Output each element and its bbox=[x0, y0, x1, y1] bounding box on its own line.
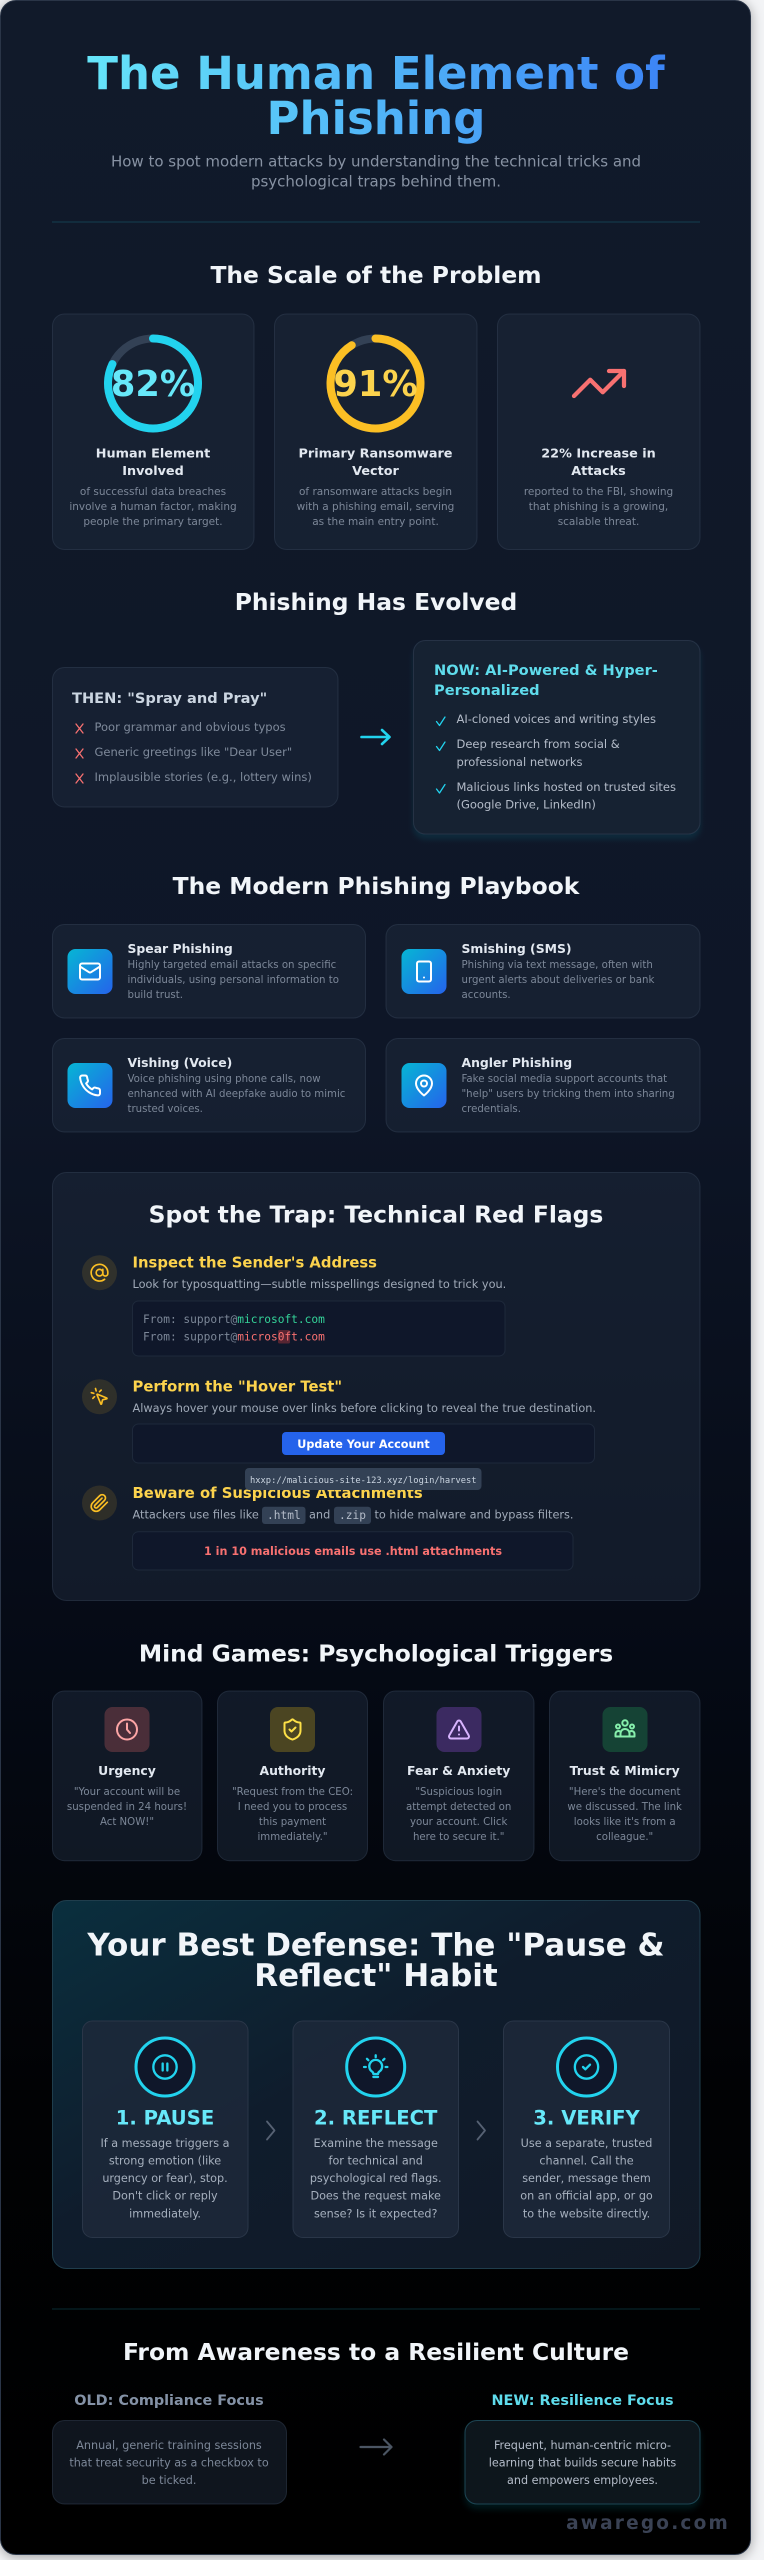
card text bbox=[128, 941, 339, 1001]
icon: mouse pointer click bbox=[82, 1379, 117, 1414]
step text: If a message triggers a bbox=[100, 2137, 230, 2150]
title bbox=[87, 47, 665, 145]
step text: to the website directly. bbox=[523, 2207, 650, 2220]
heading: spot the trap: Spot the Trap: Technical Red Flags bbox=[149, 1200, 603, 1228]
card text: Phishing via text message, often with bbox=[462, 960, 653, 971]
list item: malicious links bbox=[436, 780, 676, 812]
stat description bbox=[524, 486, 673, 528]
card text bbox=[128, 1055, 345, 1115]
stat description: with a phishing email, serving bbox=[297, 501, 454, 513]
stat description: people the primary target. bbox=[83, 516, 223, 528]
trigger quote: "Request from the CEO: bbox=[232, 1787, 353, 1798]
trigger quote: suspended in 24 hours! bbox=[67, 1802, 187, 1813]
step text: Don't click or reply bbox=[112, 2190, 218, 2203]
arrow: reflect to verify bbox=[478, 2122, 485, 2140]
stat label: 22% Increase in bbox=[541, 446, 656, 462]
panel: stat 82% bbox=[52, 314, 254, 550]
icon: clock bbox=[104, 1707, 150, 1752]
flag heading: Beware of Suspicious Attachments bbox=[132, 1485, 423, 1502]
stat description: involve a human factor, making bbox=[69, 501, 237, 513]
heading: playbook: The Modern Phishing Playbook bbox=[173, 872, 580, 900]
list item: malicious links: Malicious links hosted on trusted sites bbox=[456, 780, 676, 794]
trigger title: Trust & Mimicry bbox=[570, 1763, 680, 1778]
card text bbox=[462, 941, 654, 1001]
step title: 1. PAUSE bbox=[116, 2106, 214, 2129]
panel: authority bbox=[218, 1691, 368, 1861]
step text: Does the request make bbox=[310, 2190, 441, 2203]
step title: 2. REFLECT bbox=[314, 2106, 438, 2129]
icon: mail bbox=[68, 949, 112, 994]
title: Phishing bbox=[267, 92, 485, 145]
flag heading: Perform the "Hover Test" bbox=[132, 1379, 342, 1396]
step: pause bbox=[82, 2021, 248, 2238]
stat description: scalable threat. bbox=[558, 516, 639, 528]
trigger quote: we discussed. The link bbox=[567, 1802, 682, 1813]
heading: phishing has evolved: Phishing Has Evolved bbox=[235, 588, 517, 616]
step text: on an official app, or go bbox=[520, 2190, 653, 2203]
title: The Human Element of bbox=[87, 47, 665, 100]
icon: check circle bbox=[558, 2038, 616, 2096]
icon: phone bbox=[68, 1063, 112, 1108]
subtitle bbox=[111, 152, 641, 190]
donut chart: 82%: 82% bbox=[111, 364, 195, 405]
stat label: Vector bbox=[352, 464, 400, 479]
step text: strong emotion (like bbox=[109, 2154, 221, 2168]
stat label bbox=[541, 446, 656, 479]
trigger quote: looks like it's from a bbox=[574, 1817, 676, 1828]
heading: best defense: Your Best Defense: The "Pause & bbox=[86, 1928, 665, 1964]
step text: channel. Call the bbox=[539, 2154, 634, 2168]
flag heading: Inspect the Sender's Address bbox=[132, 1255, 377, 1272]
new description card: Frequent, human-centric micro- bbox=[494, 2439, 671, 2452]
stat description: of successful data breaches bbox=[80, 486, 226, 498]
list item: deep research bbox=[436, 737, 620, 769]
trigger quote: attempt detected on bbox=[406, 1802, 511, 1813]
stat description: as the main entry point. bbox=[312, 516, 439, 528]
card text: credentials. bbox=[462, 1104, 521, 1115]
list item: deep research: Deep research from social & bbox=[456, 737, 620, 751]
flag description with file chips: and bbox=[309, 1509, 330, 1522]
step text: urgency or fear), stop. bbox=[102, 2172, 228, 2185]
icon: at sign bbox=[82, 1255, 117, 1290]
card text bbox=[462, 1055, 675, 1115]
trigger quote: "Your account will be bbox=[74, 1787, 180, 1798]
red flag: attachments bbox=[82, 1485, 574, 1570]
trigger quote bbox=[567, 1787, 682, 1843]
trigger quote bbox=[67, 1787, 187, 1828]
heading: resilient culture: From Awareness to a Resilient Culture bbox=[123, 2338, 629, 2366]
trigger quote: immediately." bbox=[257, 1832, 328, 1843]
list item: malicious links: (Google Drive, LinkedIn) bbox=[456, 798, 596, 812]
donut chart: 91% bbox=[330, 338, 420, 428]
trigger quote: "Here's the document bbox=[569, 1787, 680, 1798]
stat box: html attachments: 1 in 10 malicious emails use .html attachments bbox=[204, 1545, 502, 1558]
step text bbox=[100, 2137, 230, 2220]
panel: stat 22% increase bbox=[498, 314, 700, 550]
panel: trust and mimicry bbox=[550, 1691, 700, 1861]
card text: accounts. bbox=[462, 990, 511, 1001]
donut chart: 91%: 91% bbox=[333, 364, 418, 405]
icon: shield check bbox=[270, 1707, 315, 1752]
trigger quote: Act NOW!" bbox=[100, 1817, 154, 1828]
stat label bbox=[299, 446, 453, 479]
card text: Smishing (SMS) bbox=[462, 941, 572, 956]
card text: Voice phishing using phone calls, now bbox=[128, 1074, 321, 1085]
trigger quote: "Suspicious login bbox=[415, 1787, 502, 1798]
card text: Spear Phishing bbox=[128, 941, 233, 956]
card text: enhanced with AI deepfake audio to mimic bbox=[128, 1089, 345, 1100]
trigger title: Urgency bbox=[98, 1763, 156, 1778]
panel: spear phishing bbox=[52, 924, 366, 1018]
stat description bbox=[297, 486, 454, 528]
step text: for technical and bbox=[329, 2154, 423, 2168]
flag description with file chips bbox=[132, 1507, 574, 1524]
stat description: of ransomware attacks begin bbox=[299, 486, 452, 498]
flag description with file chips: .zip bbox=[339, 1509, 366, 1522]
card text: Fake social media support accounts that bbox=[462, 1074, 667, 1085]
stat label bbox=[96, 446, 210, 479]
icon: trending up bbox=[574, 371, 624, 396]
old description card: be ticked. bbox=[142, 2474, 196, 2487]
trigger quote: I need you to process bbox=[238, 1802, 347, 1813]
step text: Use a separate, trusted bbox=[521, 2137, 652, 2150]
now heading: NOW: AI-Powered & Hyper- bbox=[434, 662, 658, 679]
red flag: hover test bbox=[82, 1379, 596, 1463]
new heading: NEW: Resilience Focus bbox=[491, 2393, 674, 2409]
button: update your account: Update Your Account bbox=[297, 1438, 430, 1451]
list item: cloned voices: AI-cloned voices and writing styles bbox=[456, 712, 656, 726]
new description card: learning that builds secure habits bbox=[489, 2456, 676, 2470]
heading: best defense: Reflect" Habit bbox=[254, 1958, 498, 1994]
card text: trusted voices. bbox=[128, 1104, 203, 1115]
tooltip: malicious url bbox=[245, 1468, 482, 1490]
flag description with file chips: to hide malware and bypass filters. bbox=[374, 1509, 574, 1522]
list item: poor grammar: Poor grammar and obvious typos bbox=[94, 720, 286, 734]
panel: best defense bbox=[52, 1900, 700, 2268]
stat label: Attacks bbox=[571, 464, 626, 479]
tooltip: malicious url: hxxp://malicious-site-123.xyz/login/harvest bbox=[250, 1476, 477, 1486]
flag description: Always hover your mouse over links before clicking to reveal the true destination. bbox=[132, 1402, 596, 1415]
link demo box bbox=[132, 1424, 594, 1463]
flag description: Look for typosquatting—subtle misspellings designed to trick you. bbox=[132, 1278, 506, 1291]
step text bbox=[520, 2137, 653, 2220]
panel: now bbox=[414, 640, 700, 834]
now heading bbox=[434, 662, 658, 699]
icon: pause bbox=[136, 2038, 194, 2096]
panel: fear and anxiety bbox=[384, 1691, 534, 1861]
card text: Highly targeted email attacks on specific bbox=[128, 960, 336, 971]
code sample: spoofed address: From: support@micros0ft.com bbox=[143, 1331, 325, 1344]
code sample: spoofed address: From: support@microsoft.com bbox=[143, 1313, 325, 1326]
card text: individuals, using personal information to bbox=[128, 975, 339, 986]
arrow: old to new bbox=[360, 2440, 392, 2454]
subtitle: How to spot modern attacks by understanding the technical tricks and bbox=[111, 152, 641, 170]
step: reflect bbox=[293, 2021, 458, 2238]
old description card: that treat security as a checkbox to bbox=[69, 2456, 269, 2470]
old heading: OLD: Compliance Focus bbox=[74, 2393, 264, 2409]
icon: paperclip bbox=[82, 1486, 117, 1520]
trigger title: Fear & Anxiety bbox=[407, 1763, 510, 1778]
heading: mind games: Mind Games: Psychological Triggers bbox=[139, 1640, 613, 1668]
trigger quote: colleague." bbox=[596, 1832, 653, 1843]
then heading: THEN: "Spray and Pray" bbox=[72, 690, 267, 707]
step: verify bbox=[504, 2021, 670, 2238]
donut chart: 82% bbox=[108, 338, 198, 428]
flag description with file chips: .html bbox=[267, 1509, 301, 1522]
icon: lightbulb bbox=[347, 2038, 405, 2096]
old description card bbox=[52, 2420, 286, 2504]
step text: immediately. bbox=[129, 2207, 201, 2220]
list item: generic greetings: Generic greetings like "Dear User" bbox=[94, 745, 292, 759]
button: update your account bbox=[282, 1432, 445, 1455]
stat description bbox=[69, 486, 237, 528]
card text: Angler Phishing bbox=[462, 1055, 572, 1070]
stat box: html attachments bbox=[132, 1532, 573, 1570]
arrow: then to now bbox=[362, 730, 390, 744]
flag description with file chips: Attackers use files like bbox=[132, 1509, 259, 1522]
new description card bbox=[465, 2420, 700, 2504]
stat label: Human Element bbox=[96, 446, 210, 462]
card text: "help" users by tricking them into sharing bbox=[462, 1089, 675, 1100]
card text: Vishing (Voice) bbox=[128, 1055, 232, 1070]
step text: sense? Is it expected? bbox=[314, 2207, 438, 2220]
panel: stat 91% bbox=[274, 314, 477, 550]
trigger quote: your account. Click bbox=[410, 1817, 508, 1828]
step text: sender, message them bbox=[522, 2172, 651, 2185]
panel: then bbox=[52, 668, 338, 807]
icon: map pin bbox=[402, 1063, 446, 1108]
heading: the scale of the problem: The Scale of the Problem bbox=[210, 261, 542, 289]
step title: 3. VERIFY bbox=[533, 2106, 641, 2129]
card text: build trust. bbox=[128, 990, 183, 1001]
panel: vishing bbox=[52, 1038, 366, 1132]
column: old compliance focus bbox=[52, 2393, 286, 2504]
trigger title: Authority bbox=[259, 1763, 326, 1778]
step text bbox=[310, 2137, 442, 2220]
stat description: that phishing is a growing, bbox=[529, 501, 668, 513]
list item: deep research: professional networks bbox=[456, 755, 583, 769]
panel: angler phishing bbox=[386, 1038, 700, 1132]
icon: smartphone bbox=[402, 949, 446, 994]
stat label: Primary Ransomware bbox=[299, 446, 453, 462]
red flag: sender address bbox=[82, 1255, 506, 1356]
panel: urgency bbox=[52, 1691, 202, 1861]
trigger quote bbox=[232, 1787, 353, 1843]
subtitle: psychological traps behind them. bbox=[251, 172, 501, 190]
trigger quote: this payment bbox=[259, 1817, 326, 1828]
column: new resilience focus bbox=[465, 2393, 700, 2504]
now heading: Personalized bbox=[434, 682, 540, 699]
step text: Examine the message bbox=[314, 2137, 438, 2150]
icon: warning triangle bbox=[436, 1707, 482, 1752]
new description card: and empowers employees. bbox=[507, 2474, 658, 2487]
trigger quote: here to secure it." bbox=[413, 1832, 504, 1843]
panel: spot the trap bbox=[52, 1172, 700, 1600]
code sample: spoofed address bbox=[132, 1301, 505, 1356]
card text: urgent alerts about deliveries or bank bbox=[462, 975, 654, 986]
old description card: Annual, generic training sessions bbox=[76, 2439, 262, 2452]
icon: group of people bbox=[602, 1707, 648, 1752]
arrow: pause to reflect bbox=[267, 2122, 274, 2140]
stat label: Involved bbox=[122, 464, 184, 479]
heading: best defense bbox=[86, 1928, 665, 1994]
trigger quote bbox=[406, 1787, 511, 1843]
step text: psychological red flags. bbox=[310, 2172, 442, 2185]
brand mark: awarego.com bbox=[566, 2513, 730, 2534]
stat description: reported to the FBI, showing bbox=[524, 486, 673, 498]
list item: implausible stories: Implausible stories (e.g., lottery wins) bbox=[94, 770, 312, 784]
panel: smishing bbox=[386, 924, 700, 1018]
